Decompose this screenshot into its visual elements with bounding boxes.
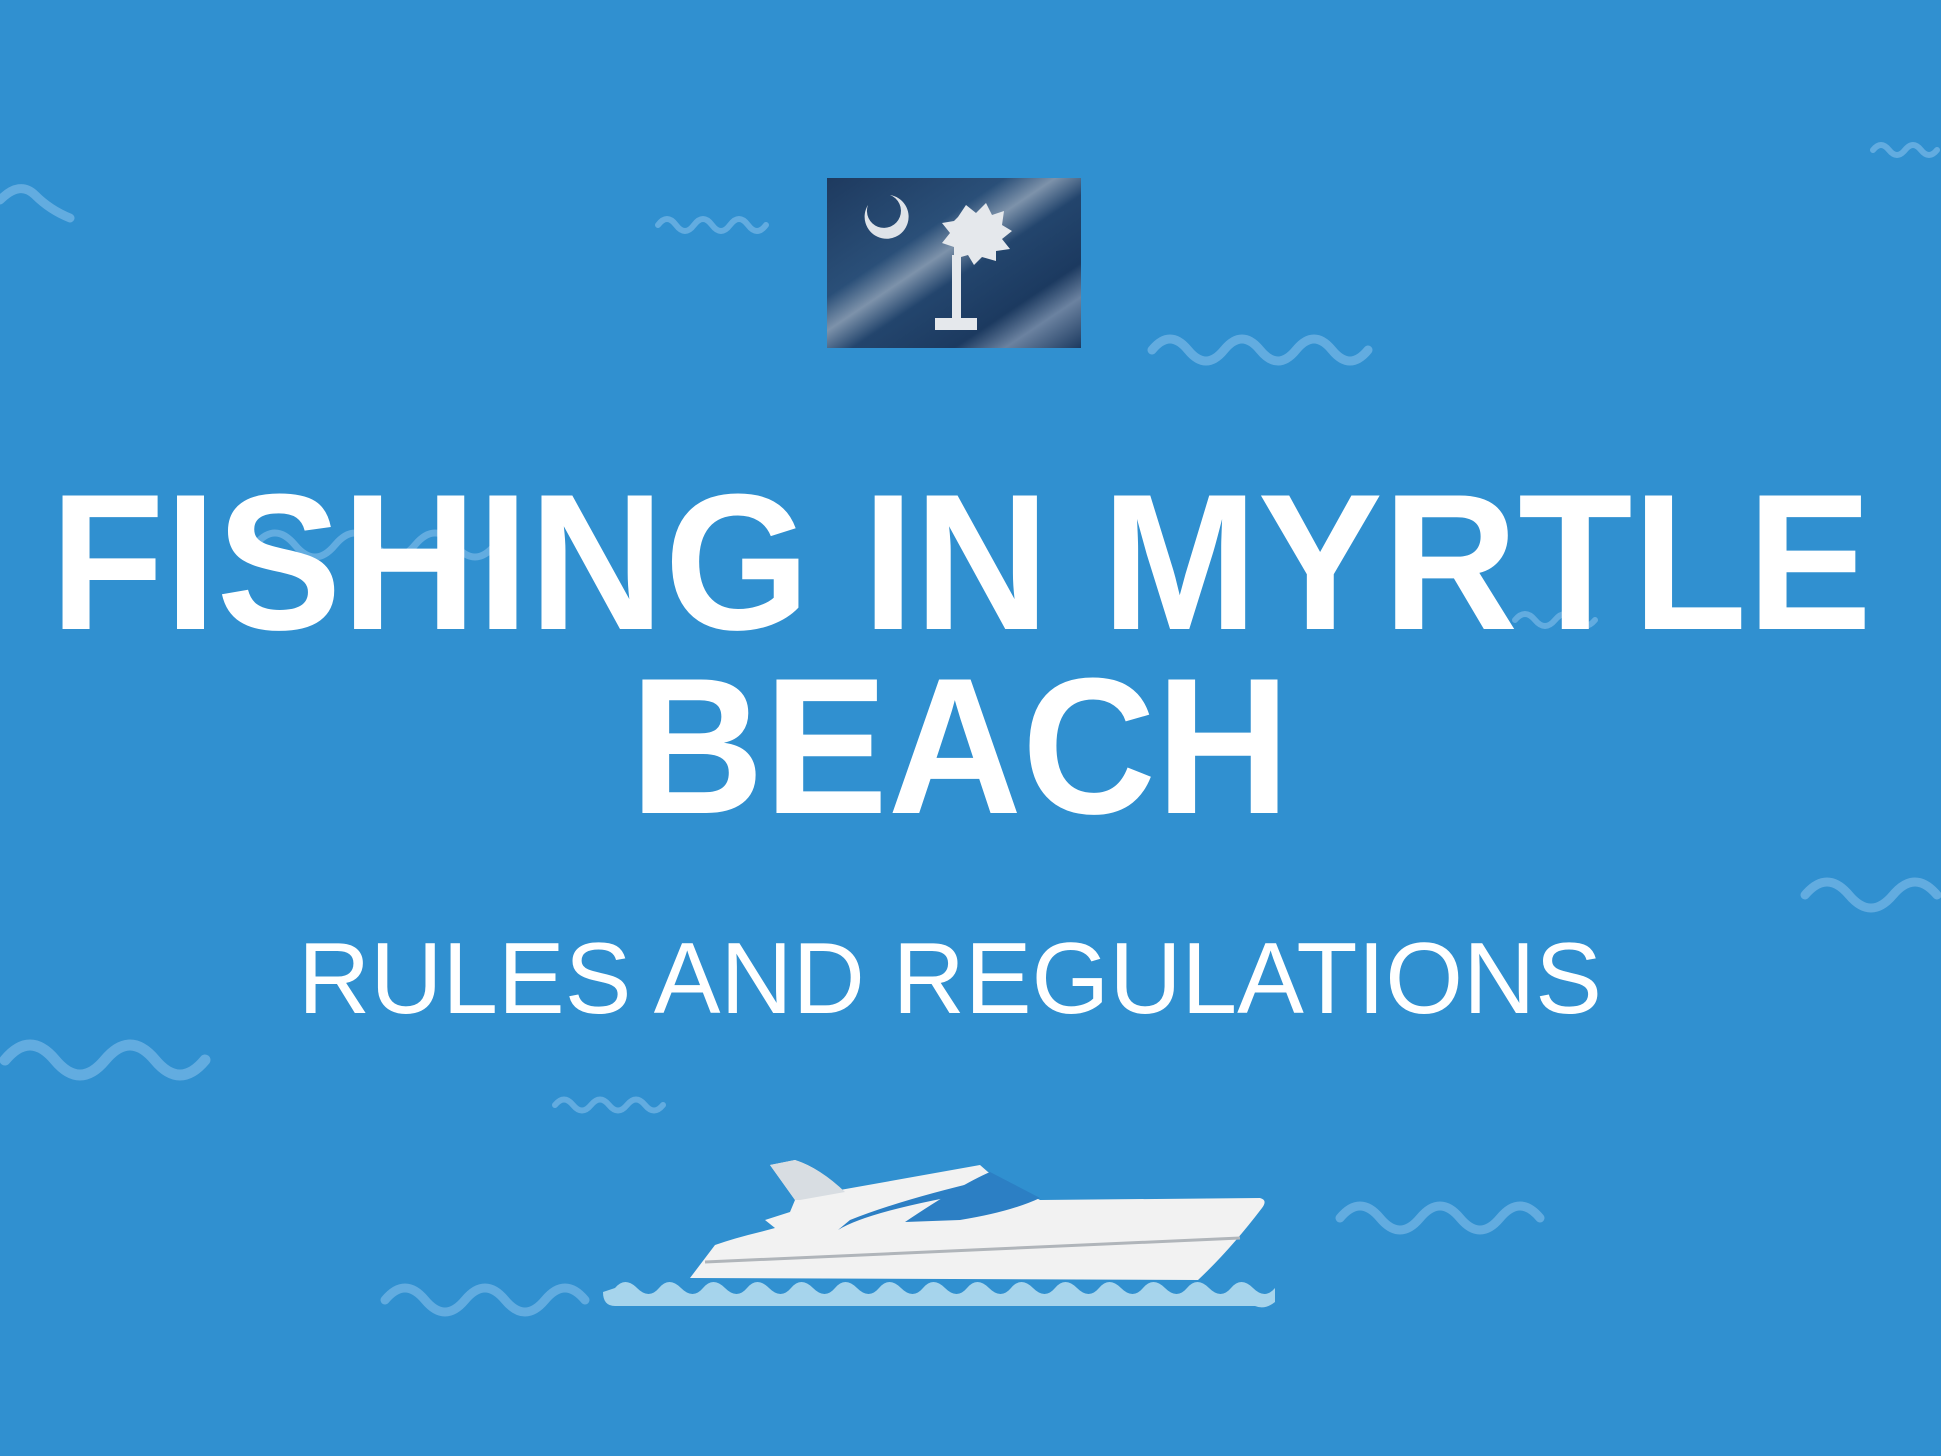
icon: boat <box>603 1160 1275 1307</box>
title: BEACH <box>630 638 1290 855</box>
title <box>50 454 1872 855</box>
title: FISHING IN MYRTLE <box>50 454 1872 671</box>
subtitle: RULES AND REGULATIONS <box>298 923 1602 1035</box>
icon: South Carolina flag <box>827 178 1081 348</box>
